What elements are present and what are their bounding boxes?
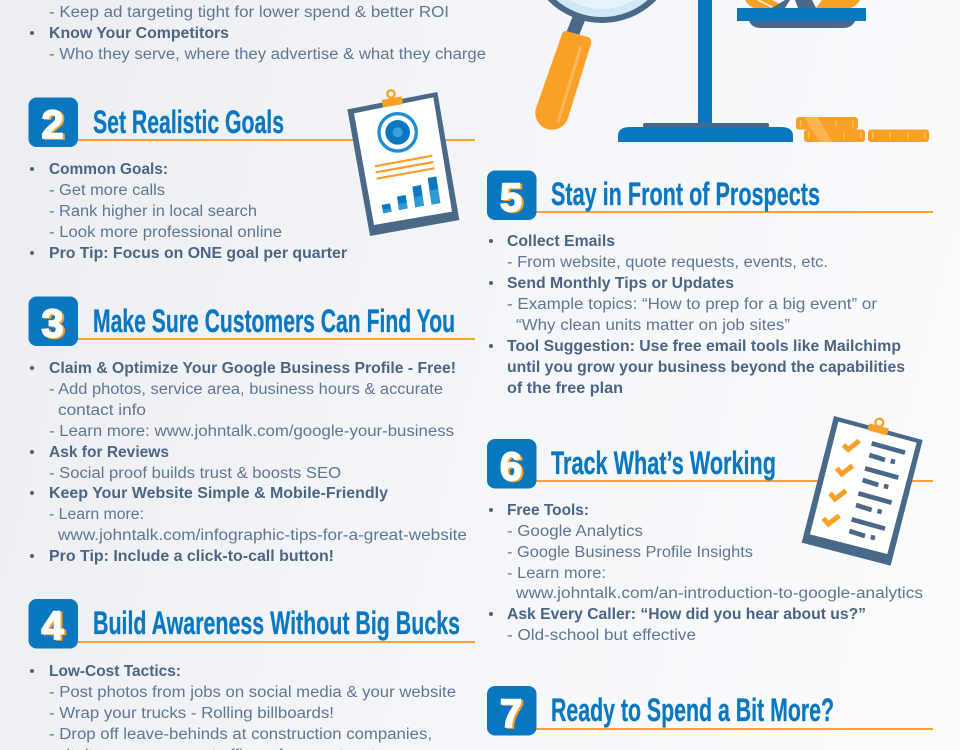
heading rule and number badge 7: 7 [500,692,522,736]
text block: google profile, reviews, website: Keep Your Website Simple & Mobile-Friendly [49,485,388,502]
heading rule and number badge 5 [487,170,933,220]
panel: step 2 set realistic goals [28,90,475,262]
heading rule and number badge 4 [28,599,475,648]
icon: checklist clipboard [802,416,923,566]
text block: emails and monthly tips: Tool Suggestion: Use free email tools like Mailchimp [507,338,901,355]
heading rule and number badge 3: 3 [41,302,64,346]
illustration: magnifying glass [529,0,675,130]
icon: gold coins [796,117,929,142]
heading rule and number badge 3 [28,296,475,346]
panel: step 3 make sure customers can find you [28,296,475,565]
heading rule and number badge 6 [487,439,933,489]
panel: step 1 text continuation [30,4,486,63]
heading: set realistic goals: Set Realistic Goals [93,104,284,140]
heading rule and number badge 2: 2 [41,103,64,147]
text block: emails and monthly tips: - From website, quote requests, events, etc. [507,254,828,271]
text block: common goals: - Look more professional online [49,224,282,241]
panel: step 1 text continuation: - Who they serve, where they advertise & what they charge [49,46,486,63]
text block: common goals [30,161,347,262]
text block: common goals: Common Goals: [49,161,168,178]
text block: emails and monthly tips: “Why clean units matter on job sites” [516,317,790,334]
heading rule and number badge 4: 4 [41,604,64,648]
text block: emails and monthly tips [489,233,905,397]
text block: google profile, reviews, website: - Learn more: [49,506,144,523]
heading: track what's working: Track What’s Working [551,445,776,481]
text block: google profile, reviews, website: Pro Tip: Include a click-to-call button! [49,548,334,565]
text block: free tools and callers: Free Tools: [507,502,589,519]
illustration: balance scale with coins [618,0,929,142]
text block: google profile, reviews, website: - Learn more: www.johntalk.com/google-your-business [49,423,454,440]
text block: emails and monthly tips: Collect Emails [507,233,615,250]
heading: build awareness without big bucks: Build Awareness Without Big Bucks [93,605,460,641]
text block: google profile, reviews, website: - Social proof builds trust & boosts SEO [49,465,341,482]
heading rule and number badge 2 [28,98,475,147]
text block: google profile, reviews, website: www.johntalk.com/infographic-tips-for-a-great-website [57,527,467,544]
panel: step 5 stay in front of prospects [487,170,933,397]
text block: free tools and callers [489,502,923,644]
heading rule and number badge 6: 6 [500,445,522,489]
text block: free tools and callers: - Old-school but effective [507,627,696,644]
text block: low-cost tactics: - Post photos from jobs on social media & your website [49,684,456,701]
panel: step 7 ready to spend a bit more [487,686,933,736]
text block: low-cost tactics: - Drop off leave-behinds at construction companies, [49,726,432,743]
text block: free tools and callers: - Google Business Profile Insights [507,544,753,561]
icon: clipboard with target and bar chart [347,90,459,236]
panel: step 4 build awareness without big bucks [28,599,475,750]
text block: free tools and callers: www.johntalk.com/an-introduction-to-google-analytics [515,585,923,602]
text block: common goals: - Rank higher in local search [49,203,257,220]
text block: low-cost tactics [30,663,456,750]
text block: low-cost tactics: - Wrap your trucks - Rolling billboards! [49,705,334,722]
text block: common goals: - Get more calls [49,182,165,199]
panel: step 1 text continuation: Know Your Competitors [49,25,229,42]
text block: google profile, reviews, website: contact info [58,402,146,419]
text block: google profile, reviews, website: Ask for Reviews [49,444,169,461]
text block: google profile, reviews, website: - Add photos, service area, business hours & accurate [49,381,443,398]
text block: emails and monthly tips: of the free plan [507,380,623,397]
text block: free tools and callers: - Google Analytics [507,523,643,540]
text block: emails and monthly tips: Send Monthly Tips or Updates [507,275,734,292]
text block: emails and monthly tips: - Example topics: “How to prep for a big event” or [507,296,877,313]
text block: common goals: Pro Tip: Focus on ONE goal per quarter [49,245,347,262]
text block: google profile, reviews, website [30,360,467,565]
text block: free tools and callers: Ask Every Caller: “How did you hear about us?” [507,606,866,623]
heading rule and number badge 7 [487,686,933,736]
heading: make sure customers can find you: Make Sure Customers Can Find You [93,303,455,339]
panel: step 6 track what's working [487,416,933,644]
text block: google profile, reviews, website: Claim & Optimize Your Google Business Profile - Free! [49,360,456,377]
text block: low-cost tactics: Low-Cost Tactics: [49,663,181,680]
heading rule and number badge 5: 5 [500,176,522,220]
text block: free tools and callers: - Learn more: [507,565,606,582]
text block: emails and monthly tips: until you grow your business beyond the capabilities [507,359,905,376]
heading: stay in front of prospects: Stay in Front of Prospects [551,176,820,212]
panel: step 1 text continuation: - Keep ad targeting tight for lower spend & better ROI [49,4,449,21]
